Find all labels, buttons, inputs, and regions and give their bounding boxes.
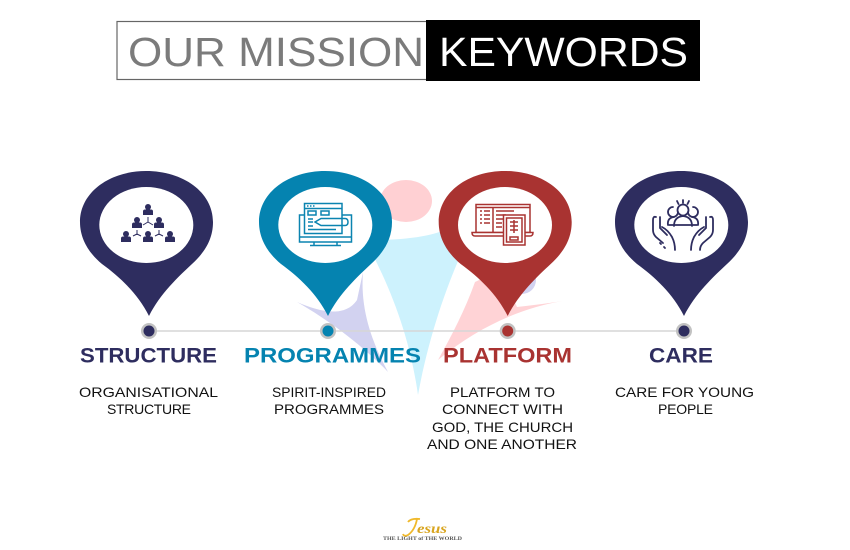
- text block: structure: ORGANISATIONAL: [79, 384, 218, 400]
- text block: care: PEOPLE: [658, 401, 713, 417]
- timeline marker: structure: [141, 323, 157, 339]
- heading: structure: STRUCTURE: [80, 344, 217, 368]
- text block: programmes: [272, 384, 386, 417]
- pin: structure: [80, 171, 213, 316]
- text block: programmes: PROGRAMMES: [274, 401, 384, 417]
- pin: care: [615, 171, 748, 316]
- footer logo: [383, 519, 462, 542]
- pin: platform: [439, 171, 572, 316]
- footer logo: esus: [417, 522, 448, 537]
- text block: care: CARE FOR YOUNG: [615, 384, 754, 400]
- text block: care: [615, 384, 754, 417]
- text block: platform: AND ONE ANOTHER: [427, 436, 577, 452]
- title left box: OUR MISSION: [128, 29, 424, 75]
- heading: programmes: PROGRAMMES: [244, 344, 421, 368]
- title banner: [117, 20, 700, 81]
- timeline line: [149, 330, 684, 332]
- watermark figure: [297, 180, 563, 395]
- text block: platform: CONNECT WITH: [442, 401, 563, 417]
- heading: platform: PLATFORM: [443, 344, 572, 368]
- timeline marker: programmes: [320, 323, 336, 339]
- pin: programmes: [259, 171, 392, 316]
- text block: structure: STRUCTURE: [107, 401, 191, 417]
- icon: organisation hierarchy: [121, 204, 175, 242]
- text block: platform: PLATFORM TO: [450, 384, 555, 400]
- title right box: [426, 20, 700, 81]
- timeline marker: platform: [500, 323, 516, 339]
- title right box: KEYWORDS: [439, 29, 688, 75]
- footer logo: THE LIGHT of THE WORLD: [383, 537, 462, 542]
- text block: structure: [79, 384, 218, 417]
- text block: platform: [427, 384, 577, 452]
- icon: laptop and tablet: [472, 204, 533, 245]
- icon: hands holding people: [653, 200, 713, 250]
- text block: programmes: SPIRIT-INSPIRED: [272, 384, 386, 400]
- icon: monitor with document and pencil: [300, 204, 352, 246]
- text block: platform: GOD, THE CHURCH: [432, 419, 573, 435]
- timeline marker: care: [676, 323, 692, 339]
- heading: care: CARE: [649, 344, 713, 368]
